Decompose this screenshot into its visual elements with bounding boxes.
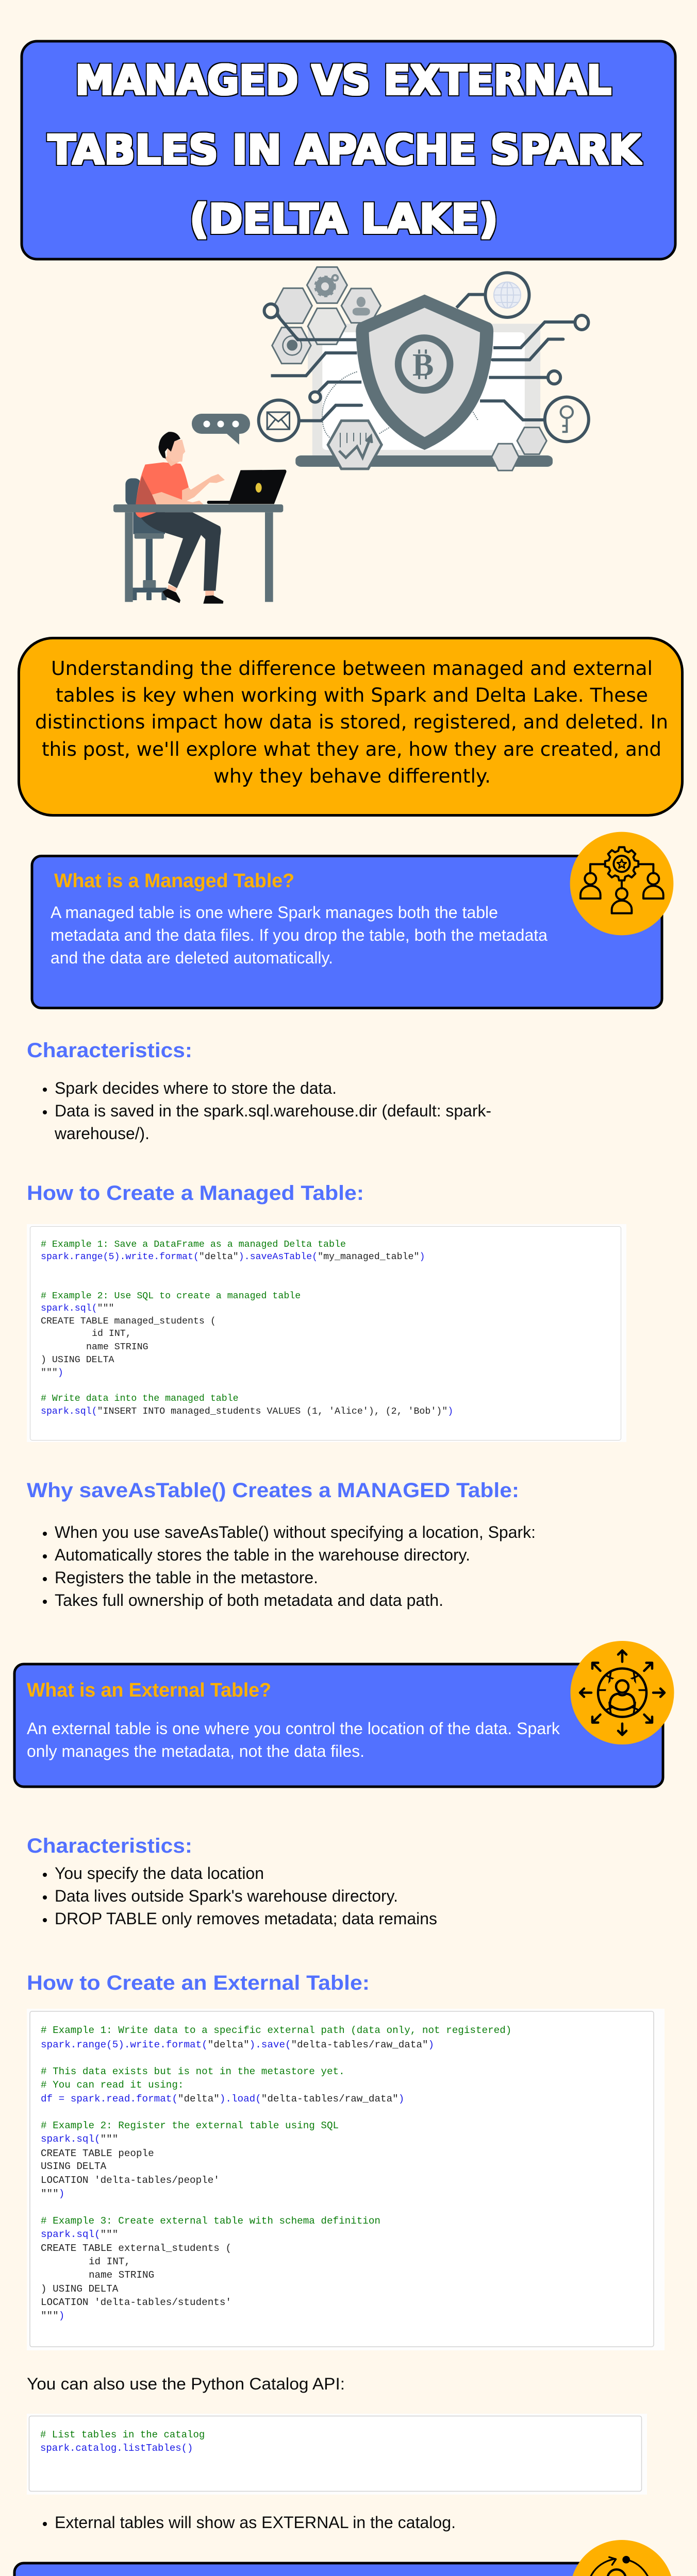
panel: intro callout: this post, we'll explore what they are, how they are created, and	[42, 738, 661, 760]
list: external characteristics: DROP TABLE only removes metadata; data remains	[55, 1909, 437, 1928]
text: managed definition: A managed table is one where Spark manages both the table	[51, 903, 498, 922]
text: managed definition: and the data are deleted automatically.	[51, 948, 333, 967]
title banner: MANAGED VS EXTERNAL	[75, 58, 611, 104]
icon: globe with person and arrows	[570, 1641, 674, 1744]
list: external characteristics: Data lives outside Spark's warehouse directory.	[55, 1887, 398, 1905]
code block: external table: # Example 2: Register the external table using SQL	[41, 2120, 339, 2131]
code block: external table: LOCATION 'delta-tables/people'	[41, 2175, 220, 2186]
text: python catalog API: You can also use the Python Catalog API:	[27, 2375, 345, 2393]
code block: managed table: # Example 2: Use SQL to create a managed table	[41, 1291, 301, 1301]
panel: intro callout: Understanding the difference between managed and external	[51, 657, 653, 680]
code block: managed table: CREATE TABLE managed_students (	[41, 1316, 216, 1327]
code block: managed table: spark.range(5).write.format("delta").saveAsTable("my_managed_table")	[41, 1252, 425, 1262]
illustration: security shield with circuit lines	[259, 267, 589, 470]
code block: external table: id INT,	[89, 2256, 130, 2267]
code block: catalog: # List tables in the catalog	[40, 2429, 205, 2441]
panel: intro callout	[19, 638, 683, 815]
panel: intro callout: distinctions impact how data is stored, registered, and deleted. In	[35, 711, 668, 733]
heading: characteristics external: Characteristics:	[27, 1835, 192, 1857]
panel: what is a managed table	[32, 856, 662, 1008]
code block: external table: CREATE TABLE external_students (	[41, 2243, 231, 2254]
panel: what is an external table	[14, 1664, 663, 1787]
code block: external table: name STRING	[89, 2269, 154, 2281]
panel: intro callout: tables is key when working with Spark and Delta Lake. These	[56, 684, 648, 706]
code block: managed table: # Write data into the managed table	[41, 1394, 239, 1404]
code block: managed table: spark.sql("""	[41, 1303, 114, 1314]
code block: external table: # This data exists but is not in the metastore yet.	[41, 2066, 345, 2077]
code block: managed table: name STRING	[86, 1342, 148, 1352]
illustration: person at desk with laptop	[113, 432, 287, 604]
heading: how to create external: How to Create an External Table:	[27, 1972, 370, 1994]
code block: managed table: spark.sql("INSERT INTO managed_students VALUES (1, 'Alice'), (2, 'Bob')")	[41, 1406, 453, 1417]
code block: external table: spark.range(5).write.format("delta").save("delta-tables/raw_data")	[41, 2039, 434, 2050]
icon: gear with people	[570, 832, 673, 935]
list: why saveAsTable reasons: Takes full ownership of both metadata and data path.	[55, 1591, 443, 1609]
heading: why saveAsTable: Why saveAsTable() Creates a MANAGED Table:	[27, 1479, 519, 1502]
code block: managed table: id INT,	[92, 1329, 131, 1339]
code block: managed table: """)	[41, 1368, 63, 1378]
heading: characteristics managed: Characteristics:	[27, 1039, 192, 1062]
list: managed characteristics	[43, 1079, 491, 1143]
code block: external table: """)	[41, 2188, 64, 2199]
panel: intro callout: why they behave differently.	[213, 765, 491, 787]
icon: bitcoin letter on shield: B	[412, 348, 434, 383]
text: managed definition: metadata and the data files. If you drop the table, both the metadata	[51, 926, 547, 944]
code block: external table	[27, 2009, 665, 2350]
title banner	[22, 41, 675, 259]
code block: external table: CREATE TABLE people	[41, 2148, 154, 2159]
heading: managed table: What is a Managed Table?	[54, 870, 294, 892]
code block: external table: # You can read it using:	[41, 2079, 184, 2091]
code block: external table: USING DELTA	[41, 2161, 107, 2172]
text: external definition: An external table is one where you control the location of the data. Spark	[27, 1719, 560, 1738]
icon: analytics cycle with magnifier	[570, 2540, 674, 2576]
panel: what is a path-based delta table	[14, 2563, 663, 2576]
list: why saveAsTable reasons: When you use saveAsTable() without specifying a location, Spark:	[55, 1523, 536, 1541]
code block: external table: LOCATION 'delta-tables/students'	[41, 2297, 231, 2308]
list: external characteristics	[43, 1864, 437, 1928]
code block: catalog	[27, 2414, 647, 2495]
code block: external table: spark.sql("""	[41, 2229, 118, 2240]
code block: external table: ) USING DELTA	[41, 2283, 119, 2295]
code block: external table: # Example 1: Write data to a specific external path (data only, not registered)	[41, 2025, 511, 2036]
title banner: TABLES IN APACHE SPARK	[48, 127, 642, 174]
code block: external table: df = spark.read.format("delta").load("delta-tables/raw_data")	[41, 2093, 404, 2105]
list: managed characteristics: warehouse/).	[54, 1124, 150, 1143]
list: external in catalog: External tables will show as EXTERNAL in the catalog.	[55, 2513, 456, 2532]
list: managed characteristics: Data is saved in the spark.sql.warehouse.dir (default: spark-	[55, 1101, 491, 1120]
heading: external table: What is an External Table?	[27, 1680, 271, 1701]
code block: catalog: spark.catalog.listTables()	[40, 2443, 193, 2454]
text: managed definition	[51, 903, 547, 967]
code block: external table: # Example 3: Create external table with schema definition	[41, 2215, 380, 2227]
list: why saveAsTable reasons: Registers the table in the metastore.	[55, 1568, 318, 1587]
text: external definition: only manages the metadata, not the data files.	[27, 1742, 364, 1760]
code block: managed table: ) USING DELTA	[41, 1355, 114, 1365]
title banner: (DELTA LAKE)	[190, 196, 498, 243]
icon: speech bubble	[192, 414, 250, 445]
code block: external table: """)	[41, 2310, 64, 2321]
code block: managed table: # Example 1: Save a DataFrame as a managed Delta table	[41, 1240, 346, 1250]
list: managed characteristics: Spark decides where to store the data.	[55, 1079, 337, 1097]
code block: managed table	[27, 1224, 626, 1442]
list: why saveAsTable reasons	[43, 1523, 536, 1609]
text: external definition	[27, 1719, 560, 1760]
heading: how to create managed: How to Create a Managed Table:	[27, 1182, 364, 1205]
code block: external table: spark.sql("""	[41, 2133, 118, 2145]
list: why saveAsTable reasons: Automatically stores the table in the warehouse directory.	[55, 1546, 470, 1564]
list: external characteristics: You specify the data location	[55, 1864, 264, 1883]
